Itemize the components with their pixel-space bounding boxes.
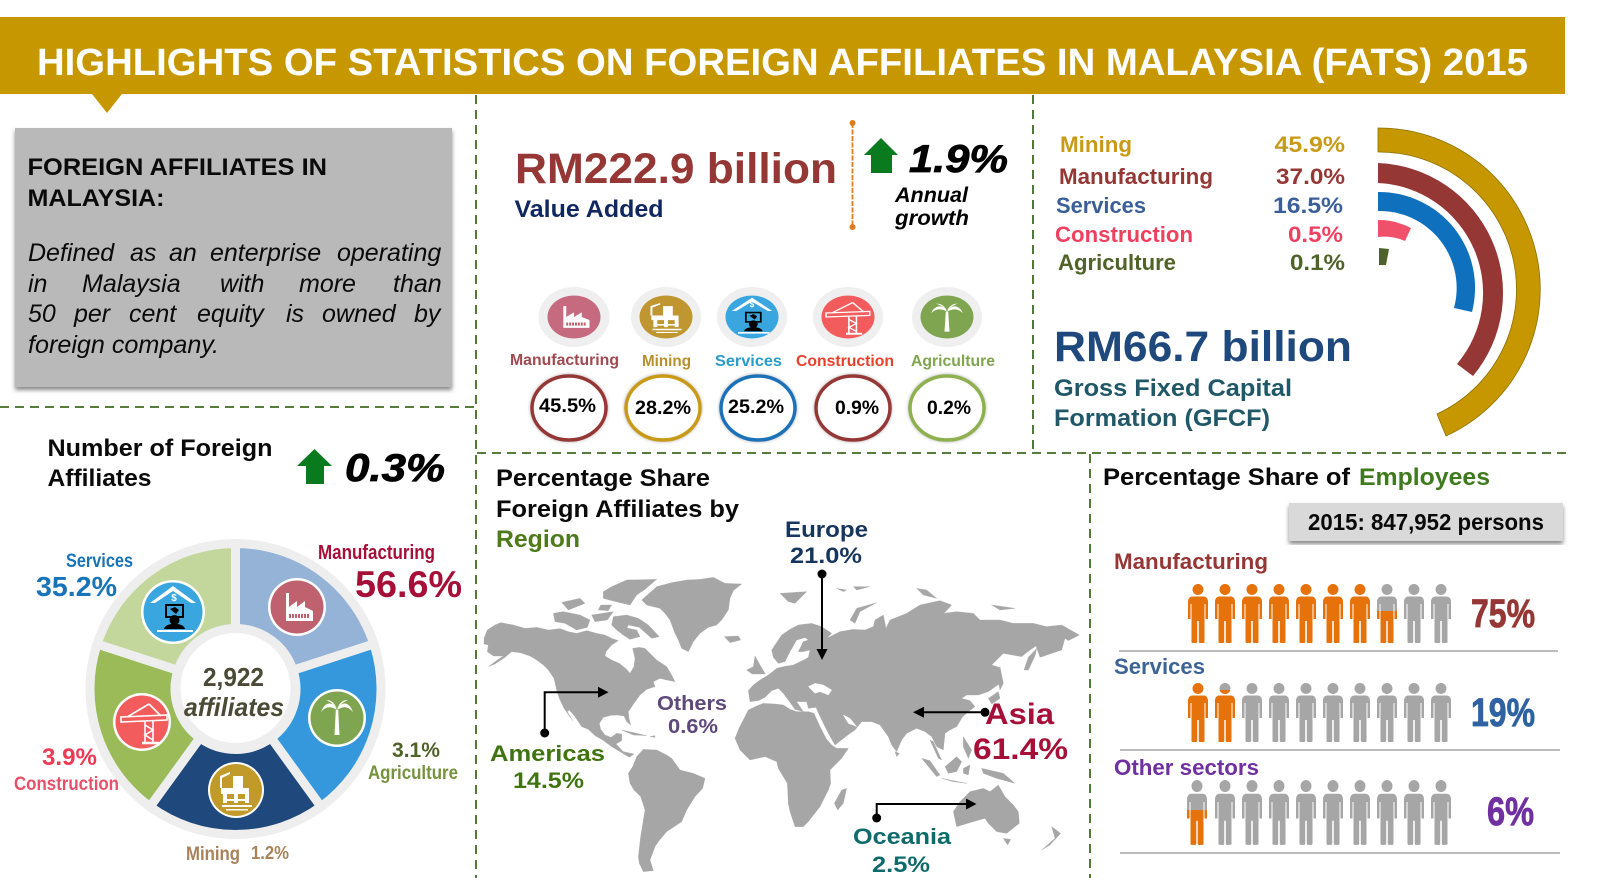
value added figure: RM222.9 billion (515, 145, 837, 193)
label: agriculture share (368, 739, 458, 784)
label: manufacturing share: Manufacturing (318, 542, 435, 564)
heading: share of employees (1103, 464, 1490, 491)
value added sector: mining (626, 287, 701, 440)
icon: crane (113, 693, 171, 751)
label: mining share (186, 843, 289, 865)
arc: manufacturing (1378, 163, 1503, 376)
definition text: Defined (28, 239, 115, 267)
heading: share of employees: Employees (1359, 464, 1490, 491)
annual growth label: growth (894, 207, 969, 230)
value added sector: construction (796, 287, 894, 440)
definition text: in (28, 270, 47, 298)
legend: gfcf sector shares: Services (1056, 193, 1146, 218)
label: construction share: 3.9% (42, 744, 97, 771)
panel: number of foreign affiliates (14, 435, 462, 865)
value added sector: manufacturing (510, 287, 619, 440)
world map (484, 577, 1079, 872)
definition text: than (393, 270, 442, 298)
definition text (28, 239, 442, 359)
label: asia (973, 698, 1068, 766)
segment: services (97, 544, 235, 670)
annual growth figure: 1.9% (909, 138, 1008, 181)
label: europe: Europe (785, 517, 868, 542)
label: others: Others (657, 693, 727, 715)
icon: up arrow (297, 449, 332, 484)
label: oceania: 2.5% (872, 852, 930, 877)
icon: up arrow (864, 138, 898, 173)
definition text: cent (129, 300, 177, 328)
callout: total persons (1289, 503, 1563, 541)
donut centre total: 2,922 (203, 662, 264, 692)
row: services: 19% (1471, 691, 1535, 735)
arrow: oceania (872, 798, 976, 822)
label: mining share: 1.2% (251, 843, 289, 863)
label: europe (785, 517, 868, 568)
definition text: 50 (28, 300, 56, 328)
heading: number of foreign affiliates: Number of Foreign (48, 435, 272, 462)
value added label: Value Added (514, 196, 664, 223)
label: manufacturing share (318, 542, 462, 605)
legend: gfcf sector shares: 0.1% (1290, 250, 1345, 275)
icon: palm (308, 689, 366, 747)
definition text: equity (197, 300, 265, 328)
heading: share by region: Region (496, 526, 580, 553)
title banner (0, 17, 1565, 113)
legend: gfcf sector shares: Manufacturing (1059, 164, 1213, 189)
definition text: per (73, 300, 112, 328)
label: americas: 14.5% (513, 768, 584, 793)
arrow: americas (540, 687, 608, 738)
donut centre total (184, 662, 284, 722)
icon: services: $ (171, 593, 177, 604)
definition text: enterprise (210, 239, 321, 267)
definition text: operating (337, 239, 441, 267)
value added sector: manufacturing: Manufacturing (510, 352, 619, 369)
heading: number of foreign affiliates: Affiliates (48, 465, 152, 492)
value added sector: mining: Mining (642, 353, 691, 370)
label: agriculture share: Agriculture (368, 763, 458, 784)
heading: share by region: Percentage Share (496, 465, 710, 492)
label: asia: Asia (985, 698, 1054, 731)
segment: construction (90, 644, 200, 807)
definition text: by (414, 300, 442, 328)
definition text: more (299, 270, 356, 298)
heading: number of foreign affiliates (48, 435, 272, 492)
label: services share (36, 551, 133, 602)
row: manufacturing: 75% (1471, 592, 1535, 636)
label: europe: 21.0% (790, 543, 862, 568)
value added sector: services: $ (750, 300, 755, 309)
legend: gfcf sector shares: Mining (1060, 132, 1132, 157)
radial bar chart (1378, 128, 1540, 436)
donut chart (87, 540, 384, 838)
icon: services (141, 580, 205, 644)
heading: share by region: Foreign Affiliates by (496, 496, 739, 523)
panel: share of employees (1103, 464, 1563, 853)
icon: oil platform (208, 762, 264, 818)
value added sector: mining: 28.2% (635, 398, 691, 419)
donut centre total: affiliates (184, 692, 284, 722)
legend: gfcf sector shares: 37.0% (1276, 164, 1345, 189)
row: other sectors (1114, 755, 1534, 845)
panel: gross fixed capital formation (1054, 128, 1540, 436)
label: oceania (853, 824, 952, 877)
icon: factory (268, 578, 326, 636)
legend: gfcf sector shares: Agriculture (1058, 250, 1176, 275)
panel: value added (510, 120, 1008, 440)
row: services: Services (1114, 654, 1205, 679)
definition text: is (286, 300, 304, 328)
annual growth label (894, 184, 969, 230)
heading: share by region (496, 465, 739, 553)
definition text: foreign company. (28, 331, 219, 359)
definition heading: FOREIGN AFFILIATES IN (28, 154, 327, 181)
growth figure: 0.3% (345, 447, 445, 490)
label: asia: 61.4% (973, 733, 1068, 766)
segment: manufacturing (236, 544, 374, 670)
gfcf label (1054, 375, 1292, 432)
label: services share: 35.2% (36, 571, 117, 602)
value added sector: construction: 0.9% (835, 398, 879, 419)
value added sector: services: 25.2% (728, 397, 784, 418)
label: oceania: Oceania (853, 824, 952, 849)
value added sector: agriculture (910, 287, 995, 440)
legend: gfcf sector shares: 45.9% (1274, 132, 1345, 157)
gfcf label: Gross Fixed Capital (1054, 375, 1292, 402)
arc: agriculture (1379, 248, 1389, 265)
definition text: with (220, 270, 264, 298)
heading: share of employees: Percentage Share of (1103, 464, 1351, 491)
label: mining share: Mining (186, 844, 240, 865)
definition text: an (169, 239, 197, 267)
gfcf label: Formation (GFCF) (1054, 405, 1270, 432)
label: construction share: Construction (14, 774, 119, 795)
panel: share by region (484, 465, 1079, 877)
panel: definition box (15, 128, 452, 387)
definition text: Malaysia (82, 270, 181, 298)
value added sector: agriculture: 0.2% (927, 398, 971, 419)
arc: services (1378, 192, 1475, 312)
row: manufacturing: Manufacturing (1114, 549, 1268, 574)
legend: gfcf sector shares: 0.5% (1288, 222, 1343, 247)
legend: gfcf sector shares: Construction (1055, 222, 1193, 247)
label: manufacturing share: 56.6% (355, 564, 462, 605)
title: HIGHLIGHTS OF STATISTICS ON FOREIGN AFFILIATES IN MALAYSIA (FATS) 2015 (37, 42, 1528, 84)
segment: agriculture (271, 644, 381, 807)
row: manufacturing (1114, 549, 1535, 643)
value added sector: agriculture: Agriculture (911, 353, 995, 370)
definition heading (28, 154, 327, 212)
value added sector: manufacturing: 45.5% (539, 396, 596, 417)
row: other sectors: 6% (1487, 790, 1534, 834)
label: agriculture share: 3.1% (392, 739, 440, 762)
definition text: owned (322, 300, 397, 328)
label: others (657, 693, 727, 738)
arc: mining (1378, 128, 1540, 436)
value added sector: construction: Construction (796, 353, 894, 370)
value added sector: services: Services (715, 353, 782, 370)
callout: total persons: 2015: 847,952 persons (1308, 509, 1544, 535)
gfcf figure: RM66.7 billion (1054, 323, 1352, 371)
legend: gfcf sector shares: 16.5% (1273, 193, 1343, 218)
legend: gfcf sector shares (1055, 132, 1345, 275)
label: services share: Services (66, 551, 133, 572)
row: other sectors: Other sectors (1114, 755, 1259, 780)
annual growth label: Annual (894, 184, 969, 207)
segment: mining (150, 738, 321, 834)
label: construction share (14, 744, 119, 795)
definition heading: MALAYSIA: (28, 185, 164, 212)
label: americas (490, 741, 605, 793)
arrow: europe (816, 570, 828, 660)
label: others: 0.6% (668, 716, 718, 738)
value added sector: services (715, 287, 795, 440)
arrow: asia (913, 707, 990, 718)
row: services (1114, 654, 1535, 742)
arc: construction (1378, 220, 1411, 241)
definition text: as (130, 239, 156, 267)
label: americas: Americas (490, 741, 605, 766)
